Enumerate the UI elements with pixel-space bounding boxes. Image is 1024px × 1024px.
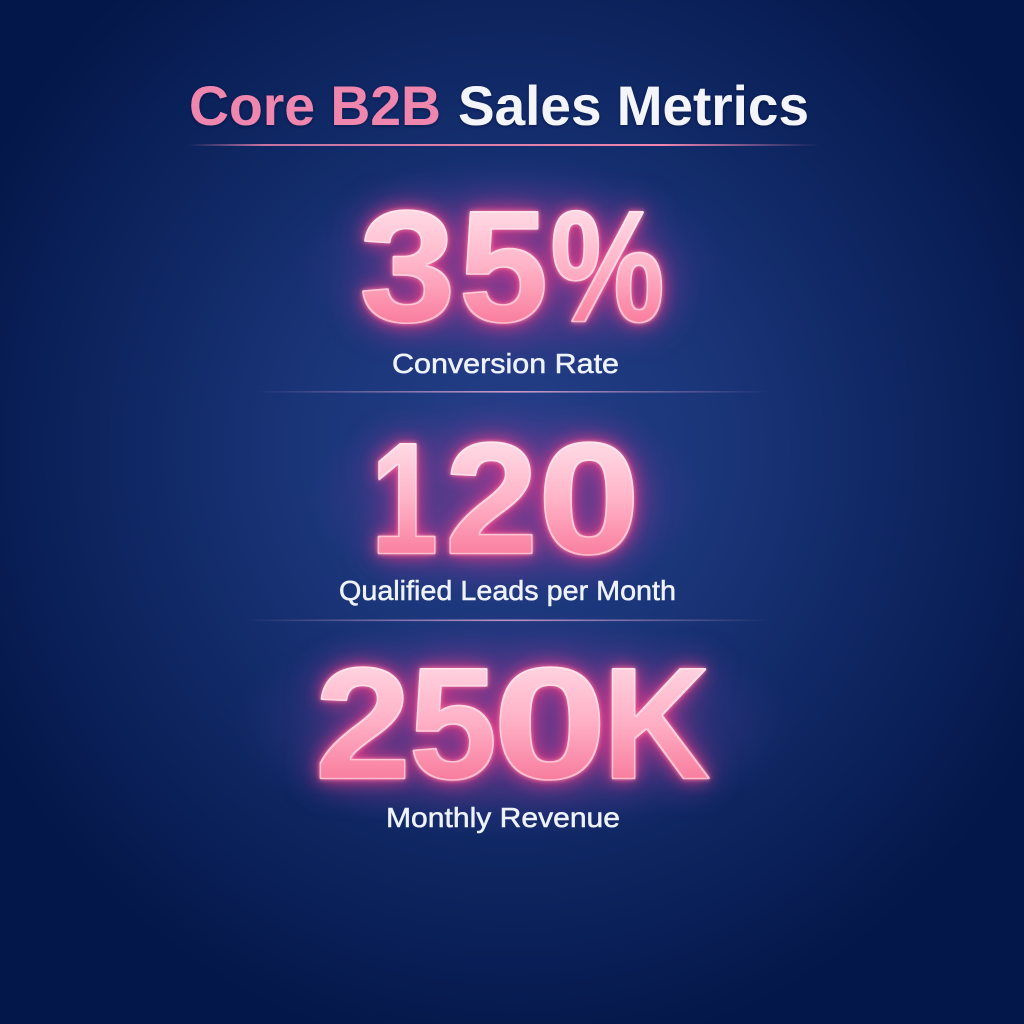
value: 120: 1 xyxy=(371,411,438,587)
title xyxy=(189,74,809,137)
divider xyxy=(245,620,770,621)
value: 250K xyxy=(315,636,710,812)
value: 35%: 3 xyxy=(360,179,456,355)
value: 250K: 2 xyxy=(315,636,411,812)
number glow halo xyxy=(297,158,727,378)
metric: qualified leads xyxy=(307,390,707,606)
metric: monthly revenue xyxy=(234,609,794,839)
divider xyxy=(255,391,770,393)
value: 35% xyxy=(360,179,664,355)
label: qualified leads per month: Qualified Leads per Month xyxy=(339,575,676,606)
title: pink part: Core B2B xyxy=(189,74,441,137)
title underline xyxy=(188,144,820,146)
label: monthly revenue: Monthly Revenue xyxy=(386,802,620,833)
title: white part: Sales Metrics xyxy=(458,74,809,137)
number glow halo xyxy=(307,390,707,606)
value: 120: 2 xyxy=(445,411,538,587)
value: 120 xyxy=(371,411,640,587)
value: 250K: 5 xyxy=(409,636,497,812)
value: 35%: 5 xyxy=(459,179,548,355)
value: 250K: 0 xyxy=(493,636,607,812)
label: conversion rate: Conversion Rate xyxy=(392,348,619,379)
value: 250K: K xyxy=(603,636,710,812)
value: 35%: % xyxy=(550,179,664,355)
value: 120: 0 xyxy=(538,411,640,587)
metric: conversion rate xyxy=(297,158,727,379)
number glow halo xyxy=(234,609,794,839)
